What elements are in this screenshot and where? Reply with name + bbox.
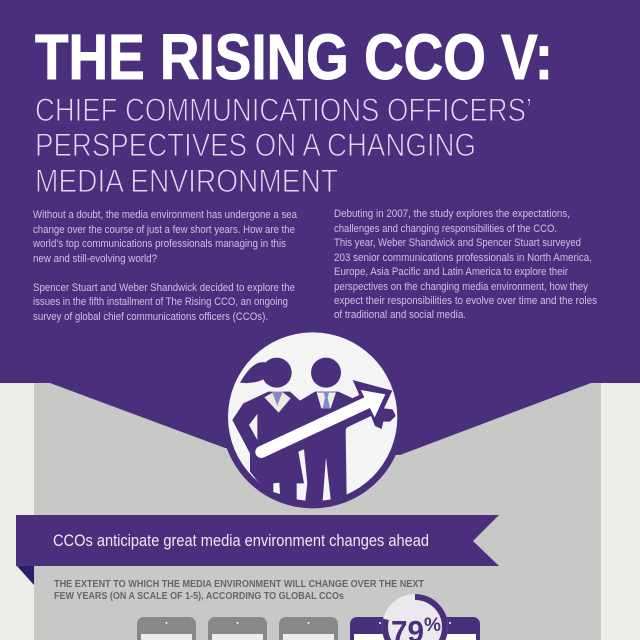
text block: intro left column: Spencer Stuart and Weber Shandwick decided to explore the [33, 282, 295, 294]
text block: intro right column: Europe, Asia Pacific and Latin America to explore their [334, 266, 568, 278]
icon: two executives holding a rising arrow [221, 326, 404, 508]
woman's ponytail [240, 362, 267, 383]
ribbon fold [16, 565, 34, 585]
woman's head [262, 358, 292, 388]
text block: intro right column: of traditional and social media. [334, 309, 466, 321]
text block: intro right column: This year, Weber Shandwick and Spencer Stuart surveyed [334, 237, 581, 249]
man's head [311, 358, 341, 388]
donut callout: 79 percent: % [424, 615, 441, 636]
text block: intro left column: world’s top communications professionals managing in this [32, 238, 286, 250]
text block: intro left column: new and still-evolving world? [33, 253, 157, 265]
subtitle: CHIEF COMMUNICATIONS OFFICERS’ [35, 92, 532, 128]
banner: section heading [16, 515, 499, 566]
arrow [261, 390, 385, 452]
man's collar and tie [317, 392, 336, 408]
text block: intro right column: perspectives on the changing media environment, how they [334, 281, 588, 293]
chart heading [54, 578, 425, 602]
text block: intro right column: 203 senior communications professionals in North America, [334, 252, 592, 264]
text block: intro left column: issues in the fifth installment of The Rising CCO, an ongoing [33, 296, 288, 308]
chart heading: FEW YEARS (ON A SCALE OF 1-5), ACCORDING TO GLOBAL CCOs [54, 590, 344, 602]
woman's collar [264, 392, 291, 413]
text block: intro right column: expect their responsibilities to evolve over time and the roles [334, 295, 597, 307]
icon: gray phone 2 [208, 617, 267, 640]
panel: gray content area [34, 383, 601, 640]
hand and arrow backing [340, 380, 396, 429]
icon: gray phone 3 [279, 617, 338, 640]
panel: purple header [0, 0, 640, 455]
text block: intro right column: Debuting in 2007, the study explores the expectations, [334, 208, 570, 220]
text block: intro left column: survey of global chief communications officers (CCOs). [33, 311, 268, 323]
banner: section heading: CCOs anticipate great media environment changes ahead [53, 531, 429, 550]
text block: intro left column: Without a doubt, the media environment has undergone a sea [33, 209, 298, 221]
title: THE RISING CCO V: [35, 21, 553, 93]
subtitle: PERSPECTIVES ON A CHANGING [35, 127, 476, 163]
gaps between arm and legs [249, 414, 331, 501]
figure bodies [232, 392, 360, 508]
chart heading: THE EXTENT TO WHICH THE MEDIA ENVIRONMENT WILL CHANGE OVER THE NEXT [54, 578, 425, 590]
text block: intro right column [334, 208, 597, 321]
icon: gray phone 1 [137, 617, 196, 640]
icon: purple phones [350, 617, 480, 640]
text block: intro left column: change over the course of just a few short years. How are the [33, 224, 295, 236]
subtitle [35, 92, 532, 199]
text block: intro right column: challenges and changing responsibilities of the CCO. [334, 223, 557, 235]
donut callout: 79 percent [382, 594, 448, 640]
subtitle: MEDIA ENVIRONMENT [35, 163, 338, 199]
text block: intro left column [32, 209, 298, 323]
